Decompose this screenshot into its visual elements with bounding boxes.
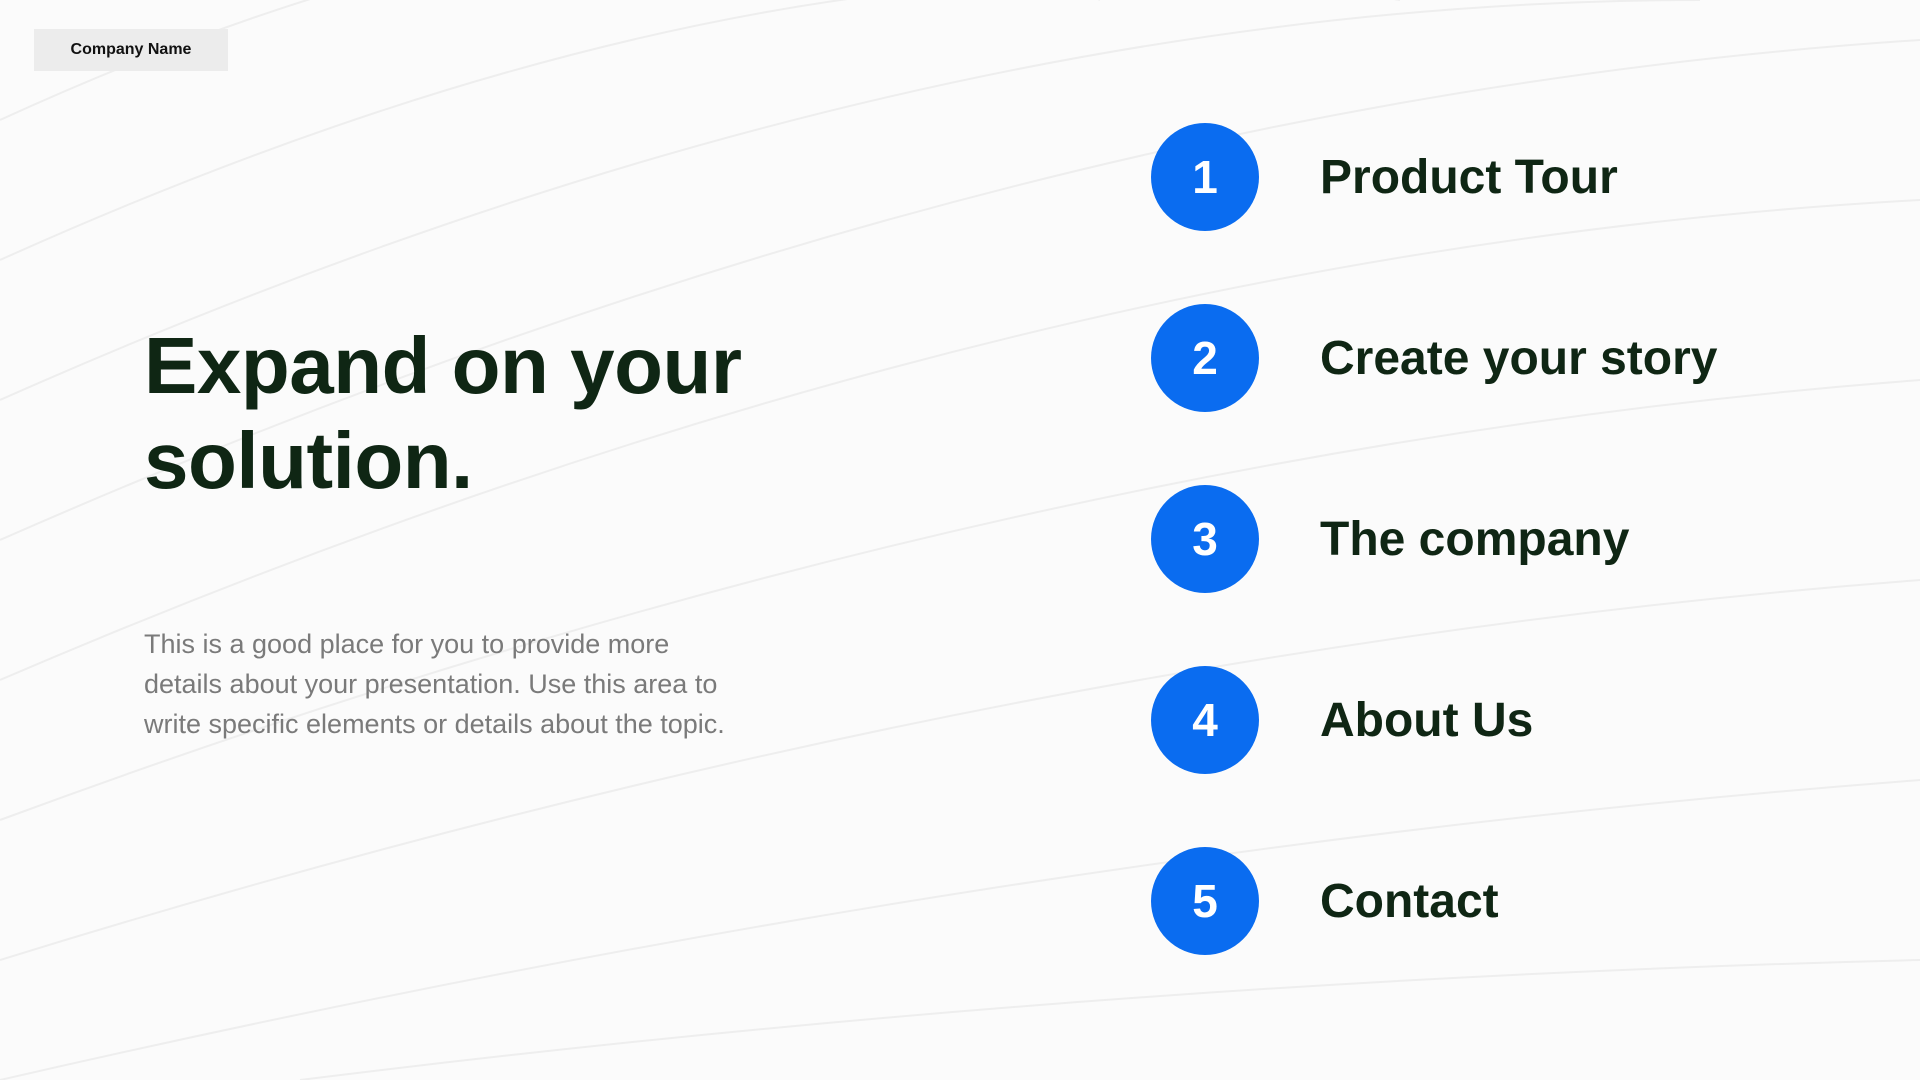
- description text: [144, 629, 725, 739]
- icon: number circle 1: [1151, 123, 1259, 231]
- description text: This is a good place for you to provide more: [144, 629, 669, 659]
- icon: number circle 4: [1151, 666, 1259, 774]
- icon: number circle 2: 2: [1192, 332, 1218, 384]
- label: Product Tour: Product Tour: [1320, 150, 1618, 204]
- title: Expand on your: [144, 321, 742, 410]
- description text: write specific elements or details about the topic.: [144, 709, 725, 739]
- label: The company: The company: [1320, 512, 1629, 566]
- label: About Us: About Us: [1320, 694, 1533, 746]
- company name tag: Company Name: [71, 41, 191, 58]
- list item 2: [1151, 304, 1718, 412]
- icon: number circle 1: 1: [1192, 151, 1218, 203]
- list item 5: [1151, 847, 1499, 955]
- label: Contact: Contact: [1320, 874, 1499, 928]
- list item 3: [1151, 485, 1630, 593]
- company name tag: [34, 29, 228, 71]
- icon: number circle 3: 3: [1192, 513, 1218, 565]
- title: solution.: [144, 416, 473, 505]
- list item 1: [1151, 123, 1618, 231]
- description text: details about your presentation. Use this area to: [144, 669, 717, 699]
- title: [144, 321, 742, 505]
- icon: number circle 2: [1151, 304, 1259, 412]
- icon: number circle 4: 4: [1192, 694, 1218, 746]
- icon: number circle 5: [1151, 847, 1259, 955]
- list item 4: [1151, 666, 1533, 774]
- icon: number circle 3: [1151, 485, 1259, 593]
- icon: number circle 5: 5: [1192, 875, 1218, 927]
- label: Create your story: Create your story: [1320, 332, 1717, 384]
